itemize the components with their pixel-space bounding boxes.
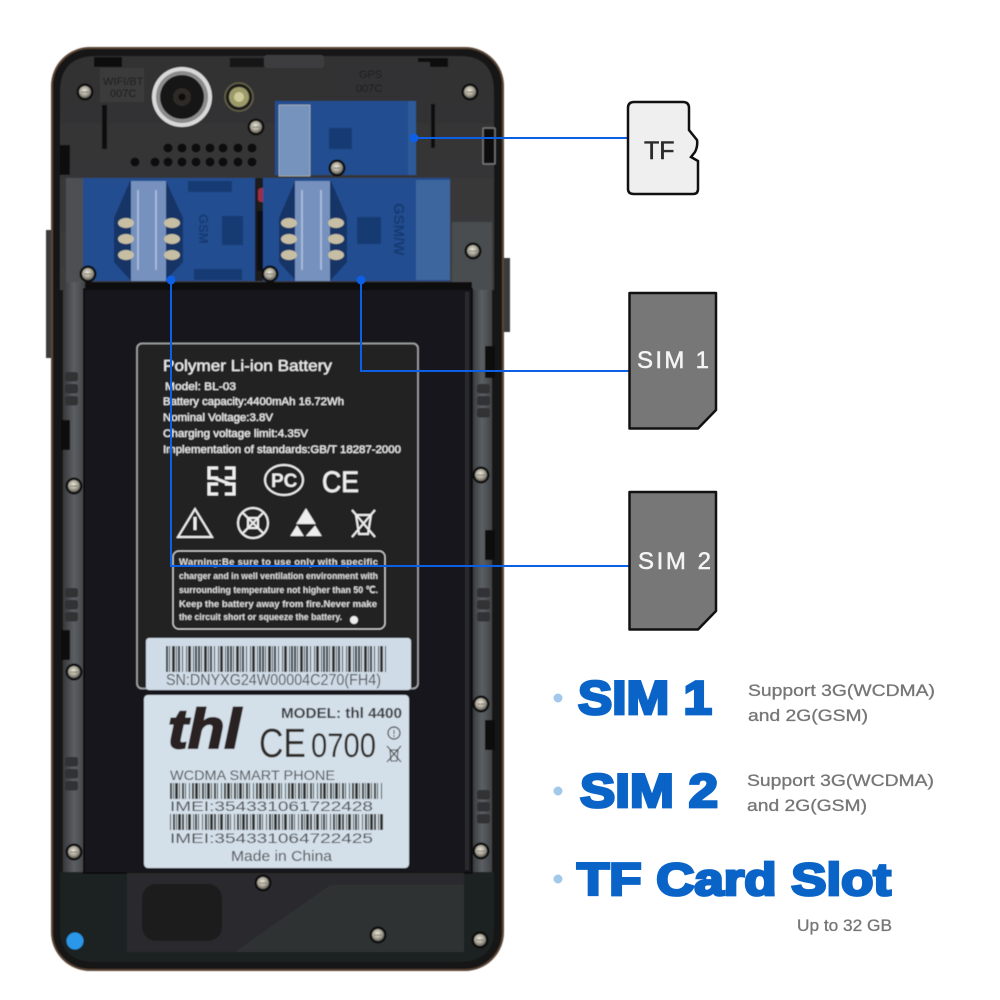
TF card icon [628,102,698,194]
feature: SIM 1: SIM 1 [578,671,712,724]
lower housing [60,872,494,962]
model and IMEI sticker: MODEL: thl 4400 [281,706,402,722]
SIM 1 slot highlighted in blue [263,178,450,281]
model and IMEI sticker: Made in China [231,849,333,865]
battery specification text: Charging voltage limit:4.35V [163,428,309,440]
model and IMEI sticker: IMEI:354331064722425 [170,830,373,846]
TF leader line [410,134,628,142]
warning box: Warning:Be sure to use only with specific [179,557,378,568]
model and IMEI sticker [144,695,409,868]
feature: SIM 2: SIM 2 [580,764,718,817]
battery specification text: Nominal Voltage:3.8V [163,412,274,424]
top detail shapes: GPS [359,69,382,81]
feature: TF card slot: TF Card Slot [577,854,891,905]
feature: TF card slot [554,854,892,935]
blue waterproof sticker [66,932,84,950]
warning box: surrounding temperature not higher than 50 ℃. [179,585,378,596]
battery specification text: Polymer Li-ion Battery [163,358,332,375]
feature: SIM 1 [554,671,935,725]
top detail shapes [60,55,495,282]
certification marks: CE [322,466,359,499]
side notches [61,282,495,750]
top detail shapes: WIFI/BT [103,76,144,88]
battery specification text: Implementation of standards:GB/T 18287-2000 [163,444,401,456]
model and IMEI sticker: 0700 [311,727,376,765]
model and IMEI sticker: thl [168,697,243,760]
warning box: charger and in well ventilation environment with [179,571,378,582]
feature: SIM 2: and 2G(GSM) [747,796,867,815]
top detail shapes: 007C [356,83,382,95]
model and IMEI sticker: CE [259,720,306,766]
reset button area [255,178,274,281]
SIM 2 card icon [630,492,716,630]
phone body [52,48,503,970]
reset button area: RESET▸ [262,217,273,255]
warning box: the circuit short or squeeze the battery. [179,612,342,623]
SIM 2 card icon: SIM 2 [638,548,711,575]
feature: TF card slot: Up to 32 GB [797,917,892,935]
lower right housing [452,222,492,290]
warning box: Keep the battery away from fire.Never make [179,599,377,610]
left side rail [63,282,85,872]
TF card icon: TF [644,137,675,165]
SIM 2 slot highlighted in blue [83,178,255,281]
model and IMEI sticker: IMEI:354331061722428 [170,798,373,814]
speaker holes [130,144,256,166]
warning icons [178,508,375,538]
feature: SIM 1: Support 3G(WCDMA) [748,681,935,700]
battery specification text: Model: BL-03 [165,381,236,393]
speaker and antenna module [127,873,464,952]
SIM 1 card icon [630,293,716,428]
top detail shapes: 007C [110,88,136,100]
phone back with the cover removed [46,48,510,970]
SIM 2 leader line [166,276,629,566]
model and IMEI sticker: WCDMA SMART PHONE [170,767,335,783]
right side rail [472,222,492,872]
SIM 1 card icon: SIM 1 [637,347,709,374]
warning box [173,551,385,629]
certification marks: PC [271,471,298,492]
side vents [65,372,490,824]
side buttons [46,230,510,358]
camera lens [152,67,212,127]
SIM 1 slot highlighted in blue: GSM/W [390,203,407,256]
SIM 1 leader line [356,276,629,371]
battery label panel [137,344,418,688]
battery [84,289,472,873]
feature: SIM 2: Support 3G(WCDMA) [747,771,934,790]
serial number sticker [146,638,411,690]
camera flash [225,83,253,111]
certification marks [209,465,359,499]
feature: SIM 1: and 2G(GSM) [748,706,868,725]
SIM 2 slot highlighted in blue: GSM [196,214,211,244]
battery specification text [163,358,401,456]
inner top housing [60,56,494,290]
screws [66,84,490,948]
serial number sticker: SN:DNYXG24W00004C270(FH4) [166,672,381,689]
TF card slot highlighted in blue [275,101,416,176]
feature: SIM 2 [554,764,934,817]
battery specification text: Battery capacity:4400mAh 16.72Wh [163,396,344,408]
